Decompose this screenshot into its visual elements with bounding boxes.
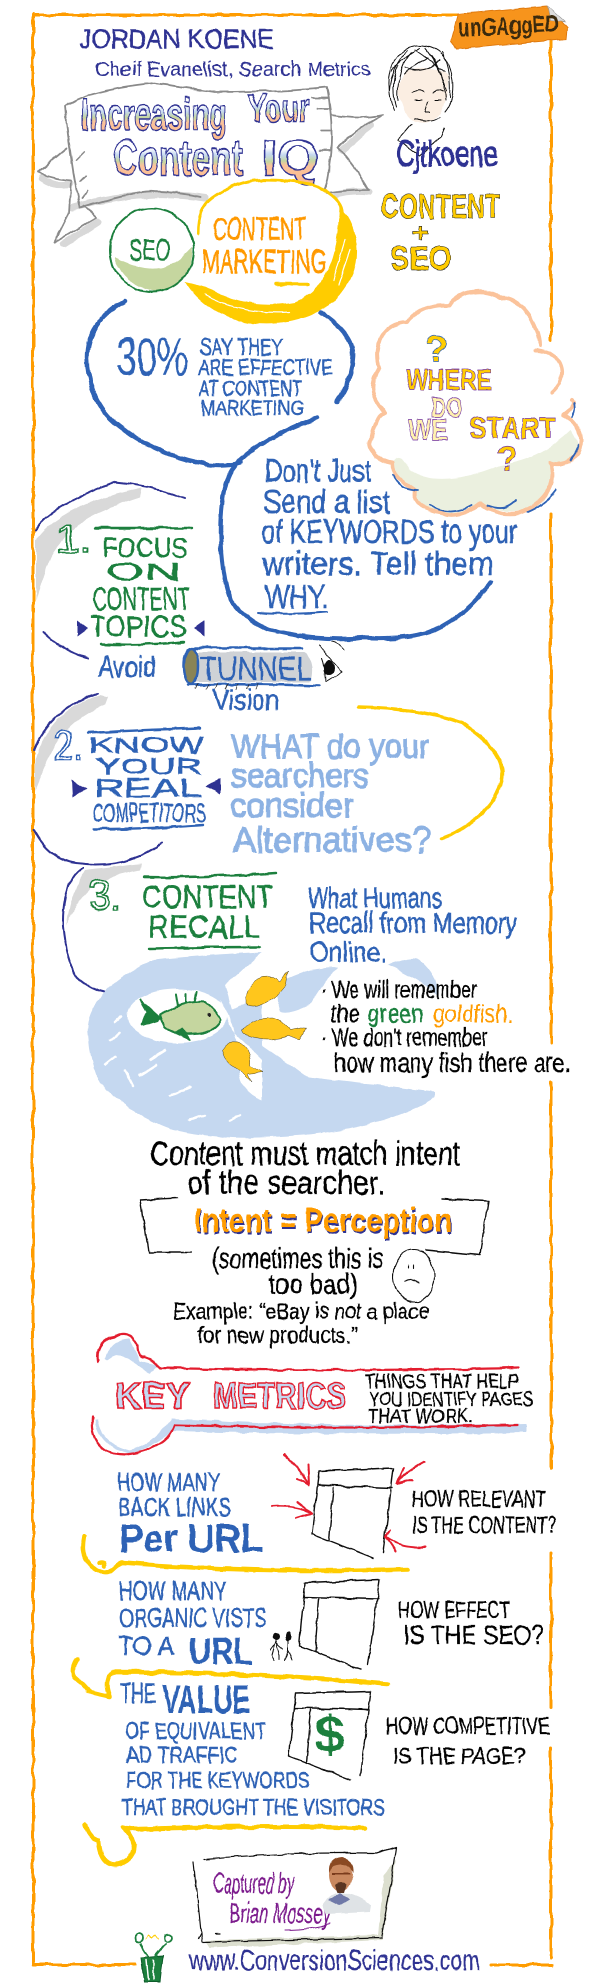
section 2: know your real competitors: YOUR (96, 753, 202, 779)
icon: yellow fish one (246, 970, 288, 1007)
content marketing circle: MARKETING (202, 243, 327, 281)
portrait of speaker (389, 45, 453, 156)
caveat note: too bad) (269, 1269, 358, 1301)
question: what do your searchers consider alternatives: Alternatives? (233, 819, 431, 860)
metric 1: back links: BACK LINKS (118, 1492, 231, 1522)
icon: page wireframe with dollar (289, 1691, 371, 1780)
metric 3: value of ad traffic: THAT BROUGHT THE VISITORS (122, 1794, 385, 1820)
icon: sad face (393, 1250, 435, 1302)
bracket: intent equals perception (140, 1198, 488, 1255)
metric 2: organic visits: HOW EFFECT (398, 1597, 510, 1624)
section 1: focus on content topics: TOPICS (90, 609, 187, 644)
section 1: focus on content topics: 1. (56, 515, 92, 562)
goldfish notes: · We will remember (321, 976, 477, 1004)
recall definition (308, 882, 517, 969)
avoid tunnel vision (98, 642, 344, 717)
icon: green fish (140, 993, 221, 1040)
logo: conversion sciences (135, 1934, 172, 1982)
speech bubble: keywords advice: of KEYWORDS to your (262, 513, 517, 550)
speech bubble: keywords advice: WHY. (265, 578, 329, 615)
question: what do your searchers consider alternatives: consider (230, 787, 354, 825)
thought cloud: where do we start: START (469, 412, 556, 445)
metric 2: organic visits: ORGANIC VISTS (119, 1603, 267, 1633)
recall definition: Online. (310, 936, 387, 969)
metric 1: back links: HOW RELEVANT (412, 1486, 546, 1513)
banner title text: Your (248, 87, 310, 131)
caveat note: Example: “eBay is not a place (173, 1298, 429, 1324)
website url: www.ConversionSciences.com (188, 1945, 480, 1977)
metric 3: value of ad traffic: FOR THE KEYWORDS (126, 1767, 310, 1793)
icon: page wireframe with arrows (272, 1455, 425, 1558)
thought cloud: where do we start (369, 292, 581, 515)
question: what do your searchers consider alternatives: WHAT do your (231, 728, 429, 766)
metric 2: organic visits: IS THE SEO? (403, 1620, 544, 1650)
speech bubble: keywords advice (221, 418, 517, 639)
content plus SEO: CONTENT (381, 188, 500, 226)
pond illustration (88, 952, 438, 1138)
thought cloud: where do we start: ? (497, 440, 518, 478)
content plus SEO: + (412, 217, 428, 248)
SEO circle: SEO (129, 234, 171, 267)
speech bubble: keywords advice: Don't Just (265, 452, 371, 489)
metric 3: value of ad traffic: VALUE (162, 1678, 250, 1722)
metric 2: organic visits (73, 1576, 544, 1697)
section 1: focus on content topics: ON (105, 559, 181, 586)
thought cloud: where do we start: WHERE (406, 364, 492, 397)
banner shadow (42, 125, 370, 244)
metric 1: back links: Per URL (119, 1517, 263, 1561)
credit box: captured by Brian Mossey: Brian Mossey (229, 1898, 332, 1930)
avoid tunnel vision: Vision (213, 684, 279, 717)
speech bubble: 30 percent: 30% (117, 327, 188, 387)
metric 1: back links (83, 1455, 556, 1573)
thought cloud: where do we start: WE (408, 414, 448, 447)
icon: page wireframe with dollar: $ (315, 1706, 345, 1764)
intent statement: Content must match intent (150, 1135, 460, 1173)
goldfish notes: goldfish. (433, 1000, 513, 1028)
caveat note (173, 1243, 435, 1348)
SEO circle (110, 208, 194, 292)
question: what do your searchers consider alternatives: searchers (231, 757, 369, 795)
banner title text: Increasing (81, 89, 227, 140)
recall definition: What Humans (308, 882, 442, 915)
metric 3: value of ad traffic (85, 1678, 550, 1865)
section 1: focus on content topics (35, 482, 205, 658)
speech bubble: 30 percent: ARE EFFECTIVE (198, 355, 333, 380)
icon: two people (270, 1631, 292, 1661)
section 2: know your real competitors: COMPETITORS (92, 798, 206, 828)
speaker title: Cheif Evanelist, Search Metrics (95, 59, 371, 81)
key metrics banner: KEY (115, 1375, 190, 1416)
thought cloud: where do we start: ? (425, 329, 448, 371)
key metrics banner: THINGS THAT HELP (365, 1371, 519, 1393)
question: what do your searchers consider alternatives (230, 707, 502, 860)
metric 3: value of ad traffic: THE (120, 1678, 156, 1710)
bracket: intent equals perception: Intent = Perception (194, 1202, 452, 1240)
metric 3: value of ad traffic: IS THE PAGE? (393, 1743, 525, 1770)
goldfish notes: green (368, 1000, 423, 1028)
key metrics banner: THAT WORK. (368, 1406, 473, 1428)
intent statement (150, 1135, 460, 1202)
section 2: know your real competitors: REAL (94, 773, 202, 803)
speech bubble: 30 percent: MARKETING (201, 397, 304, 420)
speech bubble: 30 percent (87, 301, 353, 466)
content marketing circle: CONTENT (213, 211, 306, 247)
section 3: content recall: 3. (89, 871, 121, 920)
recall definition: Recall from Memory (309, 907, 517, 940)
tunnel cylinder: TUNNEL (200, 650, 312, 687)
banner title text: IQ (262, 130, 319, 186)
speech bubble: 30 percent: AT CONTENT (199, 376, 302, 401)
speech bubble: keywords advice: writers. Tell them (261, 545, 494, 582)
section 2: know your real competitors: KNOW (89, 732, 204, 758)
speaker name: JORDAN KOENE (79, 24, 274, 54)
bracket: intent equals perception: Intent = Perception (195, 1204, 453, 1242)
section 1: focus on content topics: FOCUS (102, 532, 188, 563)
metric 1: back links: HOW MANY (117, 1467, 220, 1497)
icon: yellow fish three (222, 1042, 263, 1082)
intent statement: of the searcher. (187, 1164, 385, 1202)
badge: unGAgged: unGAggED (458, 10, 559, 43)
icon: page wireframe (299, 1580, 380, 1669)
speech bubble: 30 percent: SAY THEY (200, 334, 283, 361)
pond water (88, 952, 435, 1138)
title banner (38, 83, 383, 244)
section 1: focus on content topics: CONTENT (92, 581, 190, 617)
goldfish notes (321, 976, 571, 1078)
metric 2: organic visits: TO A (118, 1631, 174, 1661)
banner title text: Content (113, 130, 243, 186)
caveat note: (sometimes this is (212, 1243, 383, 1275)
banner blue wash (96, 1340, 525, 1452)
banner ribbon (38, 83, 383, 243)
goldfish notes: the (331, 1000, 360, 1028)
section 2: know your real competitors: 2. (54, 721, 83, 770)
metric 2: organic visits: HOW MANY (119, 1576, 227, 1606)
key metrics banner: YOU IDENTIFY PAGES (369, 1389, 533, 1411)
section 3: content recall: CONTENT (142, 879, 273, 915)
key metrics banner: METRICS (213, 1375, 346, 1416)
thought cloud: where do we start: DO (431, 392, 463, 423)
content plus SEO (381, 188, 500, 278)
badge: unGAgged (451, 6, 567, 49)
icon: yellow fish two (242, 1018, 306, 1040)
portrait of artist (322, 1857, 371, 1914)
metric 3: value of ad traffic: AD TRAFFIC (126, 1742, 238, 1769)
caveat note: for new products.” (198, 1322, 358, 1348)
avoid tunnel vision: Avoid (98, 651, 156, 684)
section 3: content recall: RECALL (148, 909, 260, 945)
goldfish notes: · We don't remember (321, 1024, 488, 1052)
section 2: know your real competitors (34, 693, 220, 864)
section 3: content recall (63, 863, 276, 993)
content marketing circle (185, 180, 357, 324)
content plus SEO: SEO (390, 240, 452, 278)
twitter handle: Cjtkoene (396, 133, 498, 174)
icon: eye (319, 642, 344, 682)
metric 3: value of ad traffic: OF EQUIVALENT (125, 1718, 266, 1745)
key metrics banner (92, 1334, 533, 1454)
credit box: captured by Brian Mossey (194, 1847, 396, 1948)
metric 2: organic visits: URL (189, 1631, 252, 1673)
banner red outline (92, 1334, 519, 1454)
credit box: captured by Brian Mossey: Captured by (213, 1868, 295, 1900)
banner title text (81, 87, 319, 186)
speech bubble: keywords advice: Send a list (263, 483, 390, 520)
